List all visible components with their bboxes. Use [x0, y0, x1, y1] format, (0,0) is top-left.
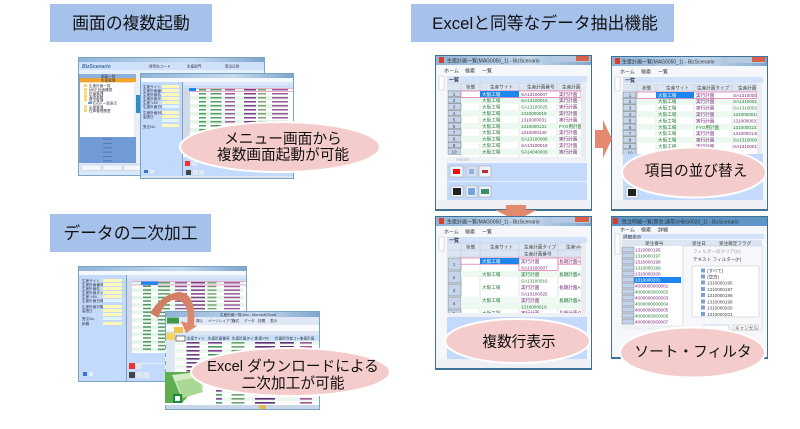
screenshot: multi-row window: 生産サイト [490, 244, 513, 250]
screenshot: list window A: 生産計画タ [562, 84, 585, 90]
screenshot: sorted columns window: 大阪工場 [658, 111, 677, 118]
screenshot: sort and filter window: 受注確定フラグ [719, 240, 752, 247]
screenshot: multi-row window: 一覧 [449, 237, 459, 244]
icon: Excel file [165, 372, 216, 405]
callout: reorder columns: 項目の並び替え [645, 162, 747, 180]
filter dropdown panel: 1310000199 [707, 300, 733, 304]
screenshot: list window A: 生産サイト [490, 84, 513, 90]
filter dropdown panel: 1310000200 [707, 306, 733, 310]
screenshot: list window over menu: 生産計画名 [143, 92, 161, 97]
screenshot: multi-row window: 長期計画A-3 [559, 297, 585, 304]
screenshot: menu window: 生産計画一覧 [89, 83, 111, 88]
callout: Excel download [191, 348, 390, 396]
screenshot: multi-row window: 5 [453, 311, 456, 316]
screenshot: base list window: 生産計画日時 [82, 298, 104, 303]
screenshot: sort and filter window: 1310000198 [635, 260, 661, 264]
screenshot: sorted columns window: 実行計画 [696, 105, 715, 112]
screenshot: list window A: 1310000019 [521, 111, 547, 116]
screenshot: base list window [78, 266, 247, 382]
screenshot: Excel window: 生産サイト [187, 336, 205, 340]
screenshot: list window A: 一覧 [482, 68, 492, 74]
screenshot: Excel window: 生産計画一覧.xlsx - Microsoft Excel [220, 312, 277, 317]
screenshot: list window A [435, 55, 592, 211]
screenshot: Excel window: 校閲 [258, 318, 266, 323]
screenshot: menu window: 計画管理 [89, 90, 104, 96]
screenshot: list window A: 大阪工場 [482, 142, 501, 149]
callout: launch multiple screens from menu: メニュー画面から [224, 130, 342, 148]
screenshot: sort and filter window: 受注明細一覧(照会:通常)(HBG0020_1) - BizScenario [622, 218, 739, 226]
screenshot: multi-row window: 1 [453, 262, 456, 267]
screenshot: multi-row window: 大阪工場 [482, 284, 501, 291]
screenshot: sorted columns window: 大阪工場 [658, 105, 677, 112]
screenshot: multi-row window: 長期計画A-3 [559, 271, 585, 278]
screenshot: list window A: 実行計画 [559, 136, 578, 143]
screenshot: sort and filter window: 受注番号 [645, 240, 664, 247]
screenshot: sorted columns window: 実行計画 [696, 92, 715, 99]
screenshot: sorted columns window: 生産計画タイプ [697, 84, 730, 92]
screenshot: base list window: 生産計画名 [82, 286, 100, 291]
screenshot: sorted columns window: 7 [629, 131, 632, 136]
filter dropdown panel: キャンセル [735, 326, 758, 330]
screenshot: list window A: 大阪工場 [482, 136, 501, 143]
screenshot: multi-row window: 長期計画か2 [559, 310, 585, 316]
screenshot: sorted columns window: 1310000131 [733, 125, 759, 130]
screenshot: multi-row window: SA13100016 [521, 278, 548, 284]
screenshot: menu window: 生産管理 [101, 78, 116, 83]
screenshot: list window A: 大阪工場 [482, 148, 501, 155]
screenshot: sorted columns window: 3 [629, 106, 632, 111]
screenshot: multi-row window: 状態 [466, 244, 476, 250]
screenshot: multi-row window: 4 [453, 301, 456, 306]
screenshot: multi-row window: 実行計画 [521, 297, 540, 304]
screenshot: list window over menu: 生産計画タイプ [143, 96, 169, 101]
screenshot: multi-row window: 3 [453, 288, 456, 293]
screenshot: list window A: FYG用計画 [559, 123, 583, 130]
screenshot: list window A: 実行計画 [559, 110, 578, 117]
screenshot: list window A: 4 [453, 111, 456, 116]
screenshot: Excel window: 生産計画 [300, 336, 315, 340]
screenshot: multi-row window: 生産計画タイプ [524, 244, 557, 250]
screenshot: list window over menu: 生産 VMI [143, 100, 158, 105]
screenshot: list window A: 生産計画番号 [527, 84, 555, 90]
filter dropdown panel: (空白) [707, 274, 720, 280]
screenshot: list window A: 実行計画 [559, 104, 578, 111]
screenshot: sort and filter window: 検索 [641, 226, 651, 234]
screenshot: sorted columns window: 大阪工場 [658, 130, 677, 137]
screenshot: list window A: 大阪工場 [482, 104, 501, 111]
screenshot: sorted columns window: 6 [629, 125, 632, 130]
screenshot: list window A: 実行計画 [559, 142, 578, 149]
screenshot: list window A: 大阪工場 [482, 110, 501, 117]
screenshot: sorted columns window: 大阪工場 [658, 137, 677, 144]
screenshot: list window A: 大阪工場 [482, 129, 501, 136]
screenshot: list window over menu: 受注No. [143, 124, 156, 129]
callout: sort and filter: ソート・フィルタ [634, 344, 752, 360]
screenshot: sorted columns window: 実行計画 [696, 137, 715, 144]
screenshot: sorted columns window: 状態 [642, 84, 652, 90]
screenshot: sort and filter window: 1310000195 [635, 248, 661, 252]
screenshot: menu window [78, 57, 265, 176]
screenshot: sorted columns window: 生産計画一覧(MAG0050_1) - BizScenario [622, 58, 715, 66]
filter dropdown panel: 1310000198 [707, 293, 733, 298]
screenshot: sort and filter window: 4000000000007 [635, 320, 669, 324]
screenshot: menu window: 画面一覧 [101, 74, 116, 78]
heading: multiple screens [50, 4, 212, 42]
screenshot: Excel window: 計画担当者コード [275, 336, 304, 340]
screenshot: base list window: 生産計画番号 [82, 282, 104, 287]
screenshot: multi-row window: 大阪工場 [482, 271, 501, 278]
screenshot: multi-row window: 生産VMI [566, 244, 583, 250]
callout: sort and filter [620, 328, 765, 378]
screenshot: sorted columns window: 実行計画 [696, 143, 715, 150]
screenshot: list window A: SA13100008 [521, 137, 548, 142]
screenshot: Excel window: 生産計画タイプ [232, 336, 258, 340]
screenshot: sort and filter window: ホーム [620, 228, 635, 234]
screenshot: sorted columns window: 4 [629, 112, 632, 117]
screenshot: menu window: 生産部門 [187, 64, 202, 68]
screenshot: sorted columns window: 実行計画 [696, 130, 715, 137]
screenshot: sorted columns window: 大阪工場 [658, 124, 677, 131]
screenshot: sorted columns window: 1310000140 [733, 131, 759, 136]
arrow: to Excel [150, 292, 197, 333]
screenshot: list window A: 6 [453, 124, 456, 129]
screenshot: list window A: 1 [453, 92, 456, 97]
screenshot: sort and filter window: 4000000000005 [635, 308, 669, 312]
screenshot: multi-row window [435, 216, 592, 370]
screenshot: multi-row window: 実行計画 [521, 284, 540, 291]
screenshot: sort and filter window [611, 216, 768, 359]
arrow: down [495, 205, 537, 216]
screenshot: Excel window: ページレイアウト [208, 318, 237, 323]
screenshot: base list window: 製造日 [82, 308, 93, 313]
screenshot: list window A: 一覧 [449, 76, 459, 84]
screenshot: sorted columns window: 1 [629, 93, 632, 98]
screenshot: list window A: ホーム [444, 68, 459, 74]
callout: multi-row display: 複数行表示 [482, 334, 556, 350]
arrow: right [595, 120, 612, 158]
screenshot: multi-row window: 大阪工場 [482, 310, 501, 316]
screenshot: menu window: 製造実績 [89, 94, 104, 99]
screenshot: sorted columns window: 1310000019 [733, 112, 759, 117]
screenshot: base list window: 生産サイト [82, 278, 100, 283]
screenshot: list window A: SA13100007 [521, 92, 548, 97]
screenshot: list window A: 大阪工場 [482, 116, 501, 123]
screenshot: sort and filter window: 4000000000002 [635, 290, 669, 294]
screenshot: list window A: 生産計画一覧(MAG0050_1) - BizScenario [447, 58, 540, 64]
screenshot: list window over menu: 製造日 [143, 114, 154, 119]
screenshot: menu window: 得意先コード [149, 64, 171, 68]
screenshot: sorted columns window: 実行計画 [696, 111, 715, 118]
screenshot: sorted columns window: 検索 [641, 68, 651, 76]
screenshot: sort and filter window: 詳細表示 [623, 234, 642, 240]
callout: multi-row display [445, 319, 590, 363]
screenshot: multi-row window: SA13100025 [521, 292, 548, 296]
screenshot: menu window: 在庫管理履歴 [89, 108, 111, 113]
screenshot: list window A: SA14040009 [521, 149, 548, 154]
screenshot: Excel window: 挿入 [196, 318, 204, 323]
screenshot: list window A: 実行計画 [559, 91, 578, 98]
screenshot: sorted columns window: 大阪工場 [658, 117, 677, 124]
screenshot: base list window: 受注No. [82, 316, 95, 321]
screenshot: sorted columns window: 大阪工場 [658, 92, 677, 99]
screenshot: sorted columns window: SA13100025 [733, 106, 760, 111]
screenshot: list window A: 検索 [465, 68, 475, 74]
screenshot: multi-row window: ホーム [444, 230, 459, 236]
heading: multiple screens: 画面の複数起動 [72, 14, 190, 33]
callout: launch multiple screens from menu [180, 122, 380, 172]
screenshot: list window A: 1310000031 [521, 117, 547, 122]
screenshot: sorted columns window: SA13100008 [733, 138, 760, 143]
screenshot: multi-row window: 長期計画A-3 [559, 258, 585, 265]
callout: Excel download: 二次加工が可能 [242, 375, 345, 392]
screenshot: sort and filter window: 4000000000003 [635, 296, 669, 300]
screenshot: sorted columns window: 2 [629, 99, 632, 104]
screenshot: list window A: 8 [453, 137, 456, 142]
screenshot: multi-row window: 実行計画 [521, 271, 540, 278]
screenshot: list window over menu: 生産サイト [143, 84, 161, 89]
screenshot: multi-row window: 実行計画 [521, 258, 540, 265]
screenshot: sort and filter window: 4000000000001 [635, 284, 669, 288]
screenshot: menu window: 受注日別 [225, 64, 240, 68]
screenshot: sort and filter window: 1310000201 [635, 278, 661, 282]
screenshot: base list window: 生産計画対象 [82, 304, 104, 309]
screenshot: sorted columns window: SA13100007 [733, 93, 760, 98]
screenshot: list window A: 5 [453, 117, 456, 122]
heading: secondary data processing [50, 214, 211, 252]
screenshot: sorted columns window: 10 [627, 150, 633, 155]
screenshot: sorted columns window: SA13100018 [733, 144, 760, 149]
screenshot: list window A: 実行計画 [559, 97, 578, 104]
screenshot: Excel window: 生産計画番号 [208, 336, 230, 340]
screenshot: sorted columns window: 9 [629, 144, 632, 149]
screenshot: sort and filter window: 4000000000006 [635, 314, 669, 318]
filter dropdown panel: 1310000195 [707, 280, 733, 286]
screenshot: list window A: 大阪工場 [482, 123, 501, 130]
callout: reorder columns [622, 148, 766, 198]
screenshot: multi-row window: 生産計画番号 [524, 250, 552, 258]
filter dropdown panel [683, 246, 762, 330]
screenshot: sort and filter window: 4000000000004 [635, 302, 669, 306]
screenshot: sorted columns window: 生産サイト [666, 84, 689, 92]
screenshot: list window A: 7 [453, 130, 456, 135]
screenshot: list window A: 実行計画 [559, 148, 578, 155]
screenshot: multi-row window: 生産計画一覧(MAG0050_1) - BizScenario [447, 218, 540, 226]
screenshot: base list window: 生産 VMI [82, 294, 97, 299]
screenshot: sorted columns window: 生産計画番 [738, 84, 761, 92]
screenshot: list window A: SA13100016 [521, 98, 548, 103]
screenshot: multi-row window: 大阪工場 [482, 258, 501, 265]
screenshot: sorted columns window: 8 [629, 138, 632, 143]
screenshot: multi-row window: 検索 [465, 228, 475, 236]
screenshot: list window A: 2 [453, 98, 456, 103]
screenshot: sort and filter window: 1310000199 [635, 266, 661, 270]
filter dropdown panel: 1310000201 [707, 312, 733, 317]
screenshot: list window A: 大阪工場 [482, 97, 501, 104]
screenshot: list window A: 大阪工場 [482, 91, 501, 98]
screenshot: list window A: 3 [453, 105, 456, 110]
screenshot: sorted columns window: 5 [629, 118, 632, 123]
screenshot: list window A: 9 [453, 143, 456, 148]
screenshot: Excel window: 表示 [270, 318, 278, 323]
screenshot: multi-row window: SA13100007 [521, 266, 548, 270]
screenshot: sorted columns window: SA13100016 [733, 99, 760, 104]
callout: Excel download: Excel ダウンロードによる [207, 358, 379, 375]
screenshot: list window over menu: 生産計画番号 [143, 88, 165, 93]
screenshot: menu window: BizScenario [82, 64, 111, 70]
screenshot: sorted columns window: 大阪工場 [658, 98, 677, 105]
screenshot: sorted columns window: 一覧 [658, 68, 668, 76]
screenshot: multi-row window: 実行計画 [521, 310, 540, 316]
filter dropdown panel: (すべて) [707, 268, 724, 274]
heading: Excel-like data extraction [411, 4, 674, 42]
screenshot: list window over menu: 生産計画日時 [143, 104, 165, 109]
screenshot: sort and filter window: 1310000200 [635, 272, 661, 276]
screenshot: Excel window: 生産VMI [255, 336, 269, 340]
screenshot: list window A: SA13100025 [521, 105, 548, 110]
screenshot: multi-row window: 2 [453, 275, 456, 280]
screenshot: list window over menu [140, 73, 294, 179]
screenshot: Excel window: データ [244, 318, 255, 323]
screenshot: Excel window [165, 311, 320, 410]
filter dropdown panel: テキスト フィルター(F) [693, 256, 742, 263]
screenshot: sorted columns window: 一覧 [625, 77, 635, 84]
heading: secondary data processing: データの二次加工 [63, 223, 198, 243]
screenshot: sort and filter window: 詳細 [658, 226, 668, 234]
screenshot: menu window: Excel 一覧表示 [93, 100, 118, 106]
screenshot: sorted columns window: ホーム [620, 70, 635, 76]
screenshot: list window over menu: 生産計画対象 [143, 110, 165, 115]
screenshot: sort and filter window: 1310000197 [635, 254, 661, 258]
screenshot: multi-row window: 1310000019 [521, 304, 547, 310]
screenshot: sorted columns window: 大阪工場 [658, 143, 677, 150]
screenshot: sort and filter window: 受注日 [692, 240, 706, 247]
filter dropdown panel: フィルターのクリア(C) [693, 248, 741, 255]
screenshot: list window A: 1310000131 [521, 124, 547, 129]
screenshot: menu window: 受注管理 [89, 98, 104, 102]
screenshot: list window A: SA13100018 [521, 143, 548, 148]
heading: Excel-like data extraction: Excelと同等なデータ抽出機能 [432, 13, 658, 33]
screenshot: base list window: 納期 [82, 321, 90, 326]
filter dropdown panel: 1310000197 [707, 287, 733, 292]
screenshot: Excel window: 数式 [232, 318, 240, 323]
screenshot: sorted columns window: FYG用計画 [696, 124, 720, 131]
screenshot: list window A: 10 [451, 149, 457, 154]
screenshot: multi-row window: 一覧 [482, 228, 492, 236]
screenshot: sorted columns window: 実行計画 [696, 117, 715, 124]
screenshot: multi-row window: 長期計画A-3 [559, 284, 585, 291]
screenshot: list window A: 実行計画 [559, 129, 578, 136]
screenshot: base list window: 生産計画タイプ [82, 290, 108, 295]
screenshot: sorted columns window: 1310000031 [733, 118, 759, 123]
callout: launch multiple screens from menu: 複数画面起動が可能 [217, 146, 349, 164]
screenshot: list window A: 実行計画 [559, 116, 578, 123]
screenshot: sorted columns window [611, 56, 768, 211]
screenshot: menu window: 出庫管理 [89, 104, 104, 110]
screenshot: menu window: MRP 計画確認 [89, 87, 113, 92]
screenshot: list window A: 1310000140 [521, 130, 547, 135]
screenshot: sorted columns window: 実行計画 [696, 98, 715, 105]
screenshot: multi-row window: 大阪工場 [482, 297, 501, 304]
screenshot: list window A: 状態 [466, 84, 476, 90]
